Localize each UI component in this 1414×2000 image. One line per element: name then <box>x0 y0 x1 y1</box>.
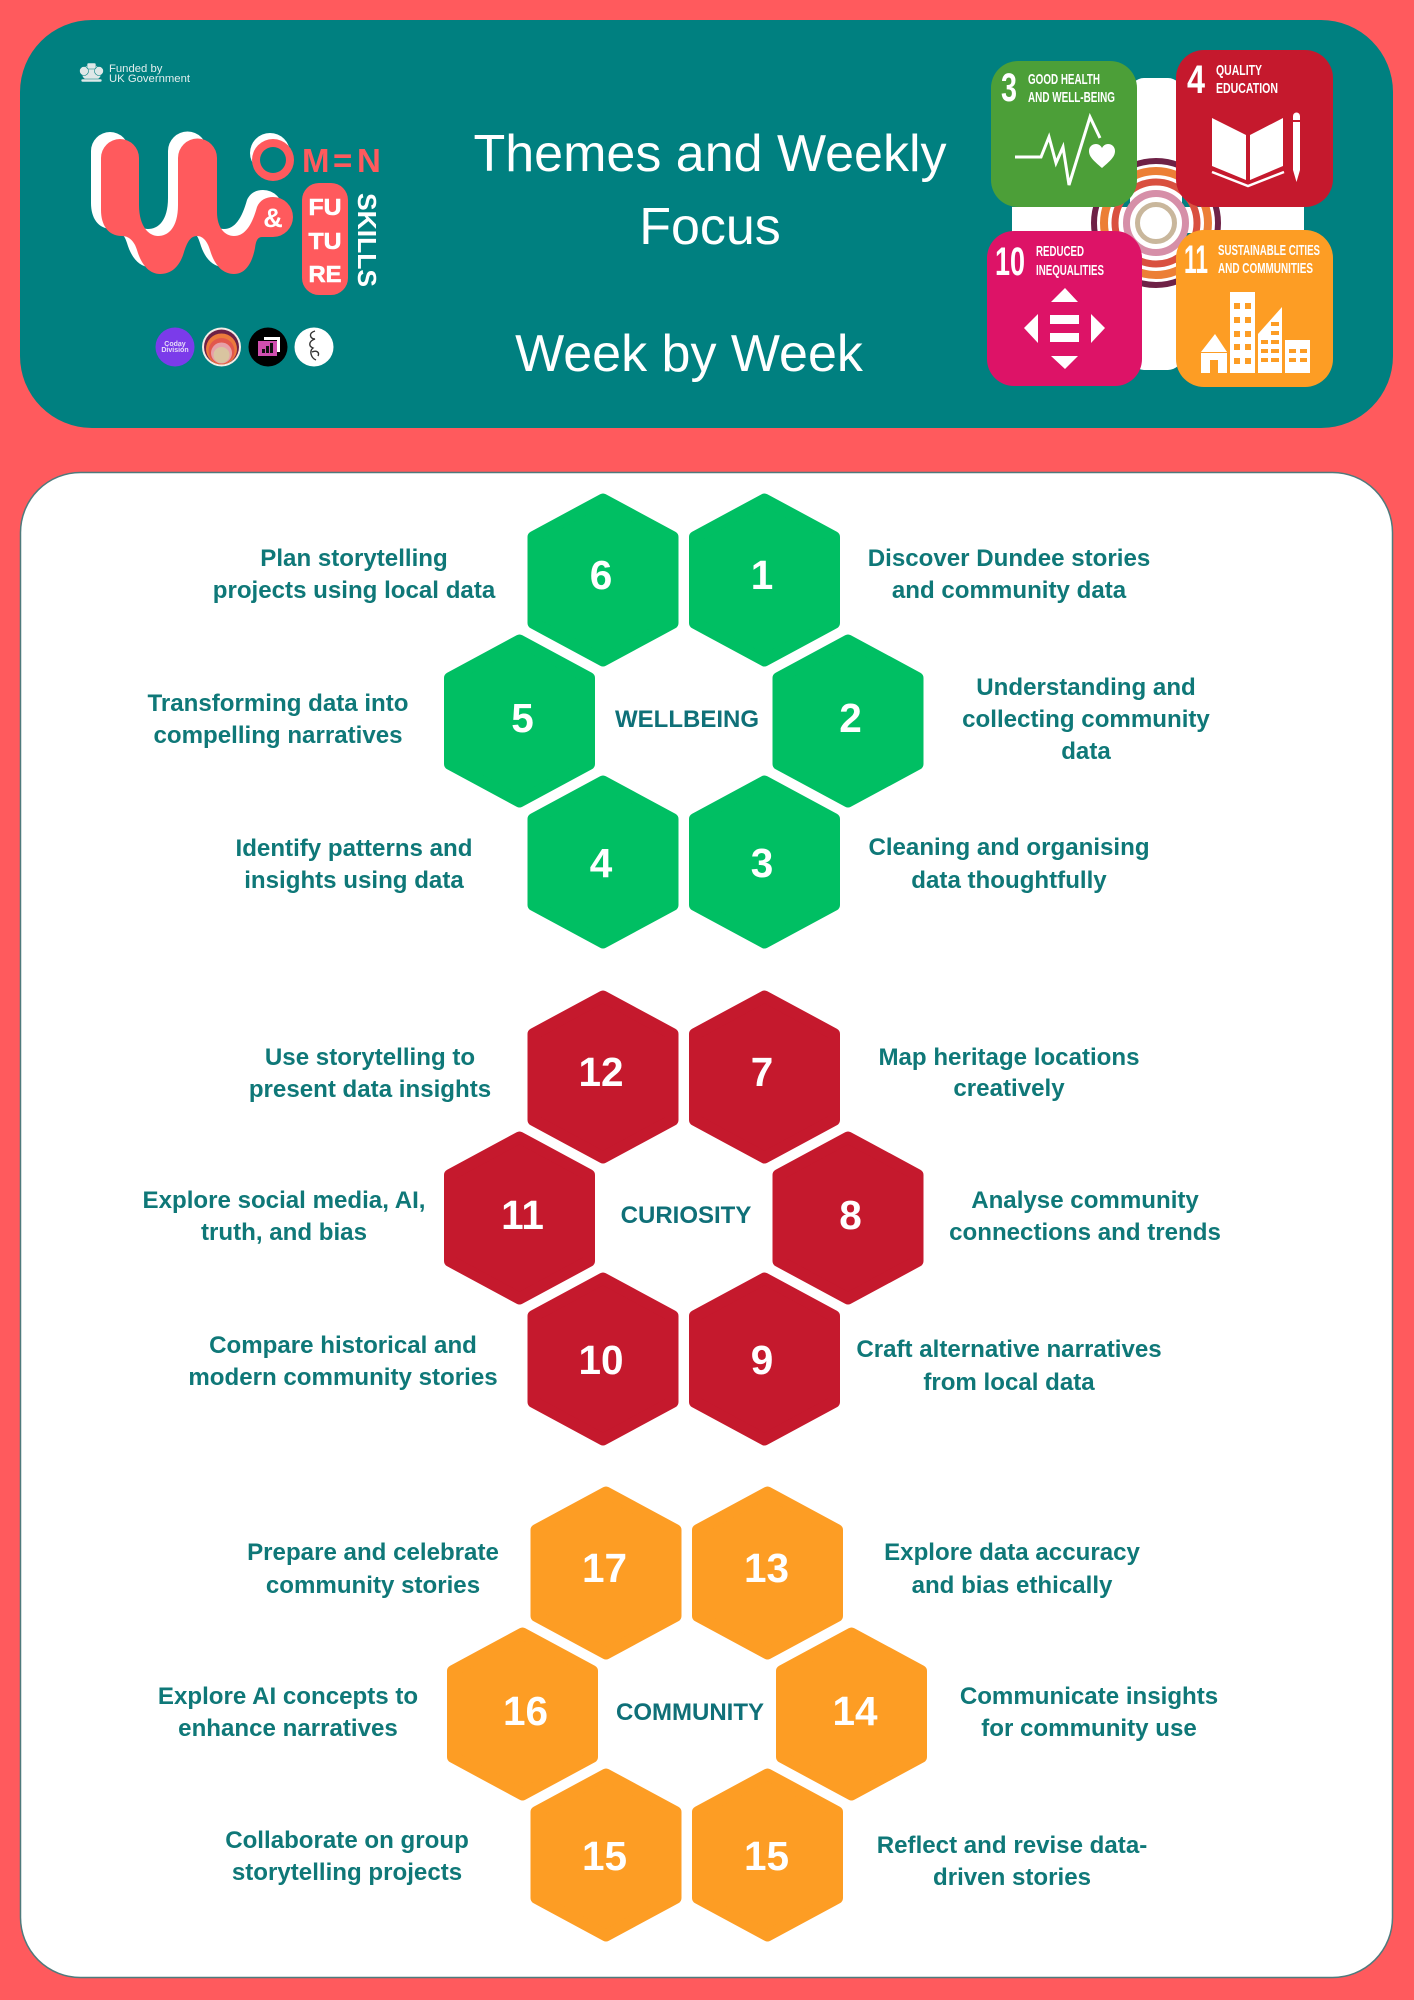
SDG cluster <box>987 50 1333 387</box>
SDG tile 11: AND COMMUNITIES <box>1218 260 1313 277</box>
hexagon: week 2 <box>778 640 918 802</box>
theme: curiosity <box>143 996 1221 1440</box>
hexagon: week 15 left <box>536 1774 676 1936</box>
text: week 12: present data insights <box>249 1076 491 1103</box>
SDG tile 10 <box>987 231 1142 386</box>
text: week 15 right: Reflect and revise data- <box>877 1832 1147 1859</box>
SDG tile 11: 11 <box>1184 238 1208 282</box>
hexagon: week 16 <box>453 1634 592 1794</box>
text: week 9 <box>856 1336 1162 1396</box>
logo: Women and Future Skills: M=N <box>302 142 381 179</box>
hexagon: week 5 <box>450 640 589 802</box>
text: week 2: data <box>1061 738 1111 765</box>
text: week 16: Explore AI concepts to <box>158 1683 418 1710</box>
hexagon: week 16: 16 <box>503 1688 548 1734</box>
hexagon: week 12: 12 <box>578 1049 624 1095</box>
hexagon: week 10 <box>534 1278 672 1440</box>
text: week 5: Transforming data into <box>147 690 409 717</box>
hexagon: week 3 <box>695 782 834 942</box>
hexagon: week 15 right <box>698 1774 837 1936</box>
hexagon: week 1 <box>695 500 834 660</box>
text: week 5: compelling narratives <box>153 722 403 749</box>
text: week 3 <box>868 834 1150 894</box>
text: week 10: Compare historical and <box>209 1332 477 1359</box>
hexagon: week 6 <box>534 500 672 660</box>
text: week 14: for community use <box>981 1715 1197 1742</box>
title: Themes and Weekly <box>473 125 947 183</box>
SDG tile 11 <box>1176 230 1333 387</box>
text: week 10: modern community stories <box>188 1364 498 1391</box>
text: week 17 <box>247 1539 499 1599</box>
text: week 3: data thoughtfully <box>911 867 1107 894</box>
text: week 3: Cleaning and organising <box>868 834 1150 861</box>
text: week 16: enhance narratives <box>178 1715 398 1742</box>
hexagon: week 12 <box>534 996 672 1158</box>
SDG tile 4 <box>1176 50 1333 207</box>
text: week 15 right <box>877 1832 1147 1891</box>
SDG tile 3: AND WELL-BEING <box>1028 89 1115 106</box>
text: week 17: Prepare and celebrate <box>247 1539 499 1566</box>
logo: Funded by UK Government: UK Government <box>109 73 191 85</box>
hexagon: week 11: 11 <box>501 1192 544 1238</box>
hexagon: week 6: 6 <box>590 552 612 598</box>
text: week 2: Understanding and <box>976 674 1196 701</box>
SDG tile 4: 4 <box>1187 58 1206 102</box>
hexagon: week 17: 17 <box>582 1545 627 1591</box>
hexagon: week 8: 8 <box>839 1192 862 1238</box>
text: week 8: Analyse community <box>971 1187 1199 1214</box>
SDG tile 3: 3 <box>1001 66 1017 110</box>
text: week 12 <box>249 1044 491 1103</box>
SDG tile 4: QUALITY <box>1216 62 1262 79</box>
hexagon: week 7 <box>695 996 834 1158</box>
text: week 7: creatively <box>953 1075 1065 1102</box>
SDG tile 11: SUSTAINABLE CITIES <box>1218 242 1320 259</box>
text: week 4: insights using data <box>244 867 464 894</box>
hexagon: week 9 <box>695 1278 834 1440</box>
SDG tile 10: REDUCED <box>1036 243 1084 260</box>
logo: Women and Future Skills: TU <box>308 228 342 254</box>
text: week 4: Identify patterns and <box>236 835 472 862</box>
text: week 13 <box>884 1539 1140 1599</box>
text: week 4 <box>236 835 472 894</box>
hexagon: week 13: 13 <box>744 1545 789 1591</box>
text: week 1: Discover Dundee stories <box>868 545 1150 572</box>
hexagon: week 14: 14 <box>832 1688 878 1734</box>
logo: Women and Future Skills: SKILLS <box>352 193 382 287</box>
logo: Funded by UK Government <box>80 63 191 85</box>
logo row: partner logos <box>156 328 334 366</box>
text: week 5 <box>147 690 409 749</box>
hexagon: week 2: 2 <box>839 695 862 741</box>
hexagon: week 14 <box>782 1634 921 1794</box>
text: week 14: Communicate insights <box>960 1683 1218 1710</box>
SDG tile 3 <box>991 61 1137 207</box>
logo: Women and Future Skills: RE <box>308 261 342 287</box>
hexagon: week 1: 1 <box>751 552 773 598</box>
text: week 2: collecting community <box>962 706 1210 733</box>
text: week 10 <box>188 1332 498 1391</box>
text: week 14 <box>960 1683 1218 1742</box>
text: week 13: Explore data accuracy <box>884 1539 1140 1566</box>
text: week 9: Craft alternative narratives <box>856 1336 1162 1363</box>
text: week 15 left <box>225 1827 469 1886</box>
text: week 11: Explore social media, AI, <box>143 1187 425 1214</box>
text: week 8 <box>949 1187 1221 1246</box>
logo: Women and Future Skills <box>91 132 382 295</box>
logo row: partner logos: Coday <box>164 341 186 348</box>
hexagon: week 13 <box>698 1492 837 1654</box>
text: week 7 <box>878 1044 1140 1102</box>
hexagon: week 3: 3 <box>751 840 773 886</box>
panel: weekly focus <box>20 472 1392 1978</box>
theme: community <box>158 1492 1218 1936</box>
hexagon: week 11 <box>450 1138 589 1298</box>
text: week 17: community stories <box>266 1572 480 1599</box>
text: week 1: and community data <box>892 577 1127 604</box>
text: week 9: from local data <box>923 1369 1095 1396</box>
logo row: partner logos: Division <box>161 347 189 354</box>
hexagon: week 4 <box>534 782 672 942</box>
SDG tile 4: EDUCATION <box>1216 80 1278 97</box>
hexagon: week 9: 9 <box>751 1337 773 1383</box>
hexagon: week 10: 10 <box>578 1337 624 1383</box>
text: week 15 right: driven stories <box>933 1864 1091 1891</box>
subtitle: Week by Week <box>515 325 864 383</box>
SDG tile 10: INEQUALITIES <box>1036 262 1104 279</box>
title <box>473 125 947 256</box>
hexagon: week 7: 7 <box>751 1049 773 1095</box>
theme label: wellbeing: WELLBEING <box>615 706 759 733</box>
hexagon: week 15 right: 15 <box>744 1833 789 1879</box>
hexagon: week 17 <box>536 1492 676 1654</box>
theme label: community: COMMUNITY <box>616 1699 764 1726</box>
title: Focus <box>639 198 781 256</box>
text: week 15 left: storytelling projects <box>232 1859 462 1886</box>
theme: wellbeing <box>147 500 1210 942</box>
theme label: curiosity: CURIOSITY <box>621 1202 751 1229</box>
text: week 11: truth, and bias <box>201 1219 367 1246</box>
text: week 13: and bias ethically <box>912 1572 1113 1599</box>
hexagon: week 8 <box>778 1138 918 1298</box>
hexagon: week 5: 5 <box>511 695 534 741</box>
hexagon: week 15 left: 15 <box>582 1833 627 1879</box>
logo: Funded by UK Government: Funded by <box>109 63 163 75</box>
text: week 8: connections and trends <box>949 1219 1221 1246</box>
text: week 6 <box>213 545 496 604</box>
text: week 12: Use storytelling to <box>265 1044 475 1071</box>
text: week 11 <box>143 1187 425 1246</box>
text: week 2 <box>962 674 1210 765</box>
text: week 6: projects using local data <box>213 577 496 604</box>
text: week 1 <box>868 545 1150 604</box>
logo: Women and Future Skills: FU <box>308 194 342 220</box>
hexagon: week 4: 4 <box>590 840 613 886</box>
text: week 7: Map heritage locations <box>878 1044 1140 1071</box>
text: week 15 left: Collaborate on group <box>225 1827 469 1854</box>
panel: header <box>20 20 1393 428</box>
SDG tile 10: 10 <box>995 240 1025 284</box>
SDG tile 3: GOOD HEALTH <box>1028 71 1100 88</box>
logo: Women and Future Skills: & <box>263 203 283 233</box>
text: week 16 <box>158 1683 418 1742</box>
text: week 6: Plan storytelling <box>260 545 448 572</box>
